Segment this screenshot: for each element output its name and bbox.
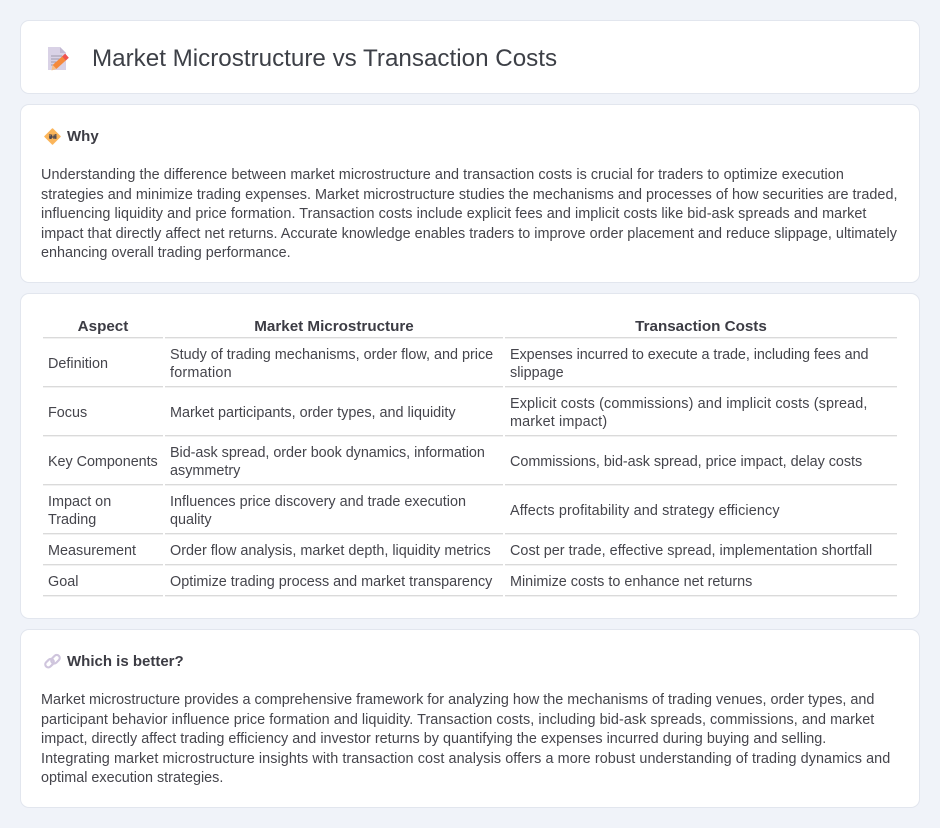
text block: why explanation: impact that directly affect net returns. Accurate knowledge enables traders to improve order placement and reduce slippage, ultimately [41,226,897,242]
row: definition: slippage [510,365,564,381]
title: Market Microstructure vs Transaction Costs [92,45,557,72]
row: definition: formation [170,365,232,381]
icon: document with pencil [48,47,69,70]
row: goal [48,574,752,590]
text block: which is better explanation [41,692,890,786]
row: definition: Definition [48,356,108,372]
row: goal: Optimize trading process and market transparency [170,574,492,590]
row: measurement [48,543,872,559]
text block: why explanation: Understanding the difference between market microstructure and transaction costs is crucial for traders to optimize execution [41,167,844,183]
row: impact on trading: Trading [48,512,96,528]
text block: why explanation [41,167,898,261]
row: key components [48,445,862,479]
row: goal: Goal [48,574,78,590]
panel: title header [20,20,920,94]
icon: warning diamond [44,128,61,145]
row: focus: Explicit costs (commissions) and implicit costs (spread, [510,396,868,412]
text block: which is better explanation: participant behavior influence price formation and liquidity. Transaction costs, including bid-ask spreads, commissions, and market [41,712,874,728]
text block: which is better explanation: optimal execution strategies. [41,770,223,786]
row: impact on trading: quality [170,512,212,528]
panel: which is better [20,629,920,808]
heading: why: Why [67,128,99,145]
text block: which is better explanation: impact, directly affect trading efficiency and investor returns by quantifying the expenses incurred during buying and selling. [41,731,826,747]
row: focus [48,396,868,430]
text block: why explanation: strategies and minimize trading expenses. Market microstructure studies the mechanisms and processes of how securities are traded, [41,187,898,203]
row: focus: Market participants, order types, and liquidity [170,405,456,421]
row: key components: asymmetry [170,463,240,479]
row: measurement: Order flow analysis, market depth, liquidity metrics [170,543,491,559]
panel: comparison table [20,293,920,619]
text block: which is better explanation: Market microstructure provides a comprehensive framework for analyzing how the mechanisms of trading venues, order types, and [41,692,874,708]
row: impact on trading: Influences price discovery and trade execution [170,494,466,510]
row: impact on trading [48,494,780,528]
row: measurement: Cost per trade, effective spread, implementation shortfall [510,543,872,559]
row: key components: Key Components [48,454,158,470]
row: key components: Bid-ask spread, order book dynamics, information [170,445,485,461]
icon: chain link [44,654,61,668]
heading: which is better: Which is better? [67,653,184,670]
table header row: Market Microstructure [254,318,414,335]
row: definition: Study of trading mechanisms, order flow, and price [170,347,493,363]
row: definition: Expenses incurred to execute a trade, including fees and [510,347,868,363]
row: measurement: Measurement [48,543,136,559]
row: impact on trading: Impact on [48,494,111,510]
panel: why [20,104,920,283]
row: focus: market impact) [510,414,607,430]
text block: which is better explanation: Integrating market microstructure insights with transaction cost analysis offers a more robust understanding of trading dynamics and [41,751,890,767]
row: definition [48,347,868,381]
table header row [78,318,767,335]
text block: why explanation: enhancing overall trading performance. [41,245,291,261]
table header row: Aspect [78,318,128,335]
table header row: Transaction Costs [635,318,767,335]
row: goal: Minimize costs to enhance net returns [510,574,752,590]
row: focus: Focus [48,405,87,421]
row: key components: Commissions, bid-ask spread, price impact, delay costs [510,454,862,470]
row: impact on trading: Affects profitability and strategy efficiency [510,503,780,519]
text block: why explanation: influencing liquidity and price formation. Transaction costs include explicit fees and implicit costs like bid-ask spreads and market [41,206,866,222]
